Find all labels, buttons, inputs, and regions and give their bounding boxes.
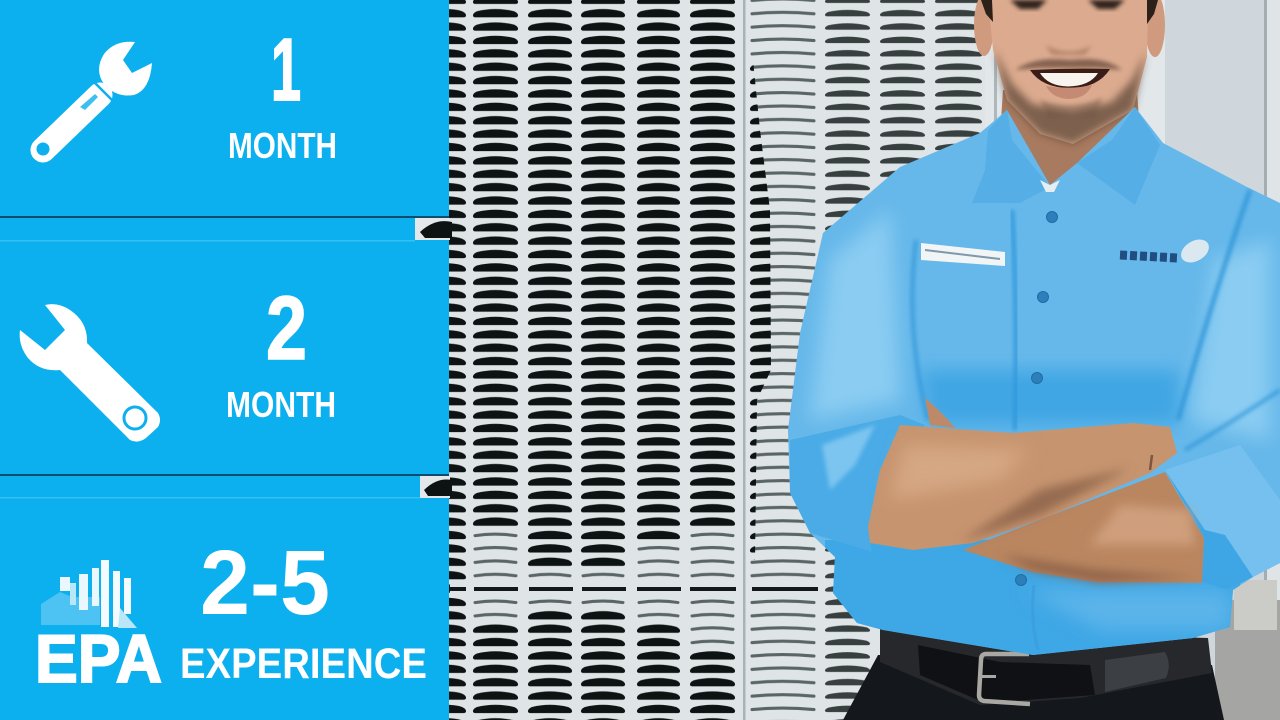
moustache shadow [1015, 59, 1122, 70]
panel: 2 month [0, 240, 449, 476]
lower shirt shading [920, 370, 1180, 425]
number: 2-5: 2-5 [200, 532, 330, 634]
hair sides [981, 0, 993, 22]
panel strips behind the cards [0, 216, 452, 498]
head [974, 0, 1165, 144]
label: month: MONTH [228, 125, 337, 166]
skyline [41, 560, 137, 628]
collar left [972, 110, 1050, 203]
mouth [1030, 69, 1110, 88]
number: 2: 2 [266, 279, 307, 379]
photo: smiling HVAC technician [788, 0, 1280, 720]
nose shadow [1045, 45, 1092, 55]
crossed forearms [868, 398, 1204, 583]
background: condenser unit grille [449, 0, 982, 720]
icon: wrench, tilted left [20, 304, 160, 442]
lower forearm [963, 472, 1204, 583]
finger crease [1150, 455, 1152, 470]
label: month: MONTH [226, 384, 336, 425]
sleeve fold lines [912, 240, 928, 420]
collar right [1077, 107, 1160, 205]
rolled cuff right [1165, 445, 1280, 590]
icon: wrench, tilted right [36, 42, 152, 156]
rolled cuff left [790, 415, 925, 552]
eyes and brows [1010, 0, 1047, 9]
icon: EPA logo with skyline [35, 560, 162, 697]
placket [1012, 210, 1016, 430]
number: 1: 1 [271, 20, 301, 119]
upper forearm [868, 423, 1177, 550]
shirt [788, 107, 1280, 660]
shirt buttons [1016, 212, 1058, 586]
background: wall and service panel [985, 0, 1280, 720]
name badge [921, 243, 1005, 266]
panel: 1 month [0, 0, 449, 218]
panel: 2-5 experience [0, 497, 449, 720]
chest logo [1120, 235, 1213, 267]
sleeve highlights [810, 210, 900, 420]
logo letters: EPA [35, 621, 162, 697]
lower lip [1046, 85, 1092, 99]
hand behind arm [925, 398, 955, 428]
neck [1000, 90, 1140, 190]
label: experience: EXPERIENCE [180, 640, 427, 688]
belt [880, 628, 1212, 705]
trousers [843, 655, 1224, 720]
stubble [994, 48, 1146, 144]
undershirt [1040, 180, 1060, 192]
teeth [1040, 73, 1098, 86]
